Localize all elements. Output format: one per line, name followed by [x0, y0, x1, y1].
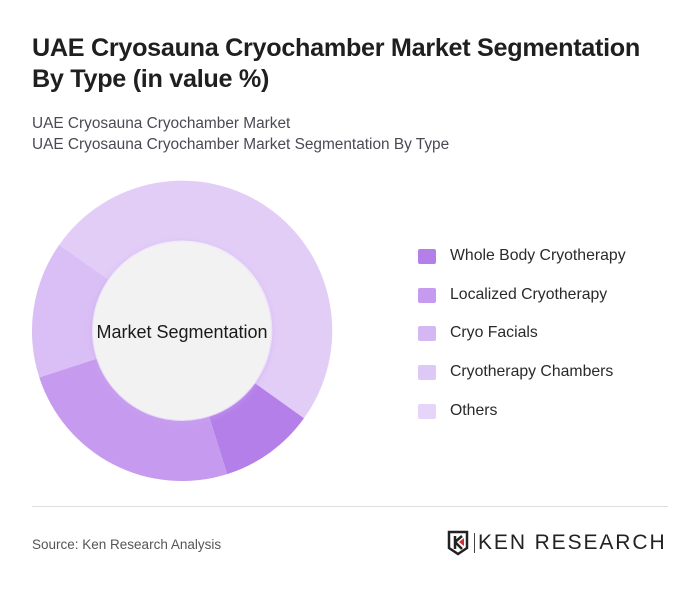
logo: KEN RESEARCH	[478, 531, 667, 554]
segment: others / chambers	[59, 181, 332, 418]
legend item: Cryo Facials	[450, 324, 538, 341]
title: By Type (in value %)	[32, 65, 269, 93]
segment: localized cryotherapy	[39, 359, 227, 481]
subtitle: UAE Cryosauna Cryochamber Market	[32, 115, 290, 132]
legend	[418, 247, 626, 419]
center label: Market Segmentation	[96, 322, 268, 342]
legend item: Others	[450, 402, 497, 419]
legend item: Whole Body Cryotherapy	[450, 247, 626, 264]
legend item	[418, 402, 497, 419]
source: Source: Ken Research Analysis	[32, 537, 221, 552]
subtitle: UAE Cryosauna Cryochamber Market Segmentation By Type	[32, 136, 449, 153]
legend item: Localized Cryotherapy	[450, 286, 607, 303]
segment: cryo facials	[32, 245, 108, 377]
legend item: Cryotherapy Chambers	[450, 363, 613, 380]
center label	[93, 242, 271, 420]
subtitle	[32, 115, 449, 153]
segment: whole body cryotherapy	[209, 383, 304, 474]
title	[32, 34, 640, 93]
title: UAE Cryosauna Cryochamber Market Segmentation	[32, 34, 640, 62]
